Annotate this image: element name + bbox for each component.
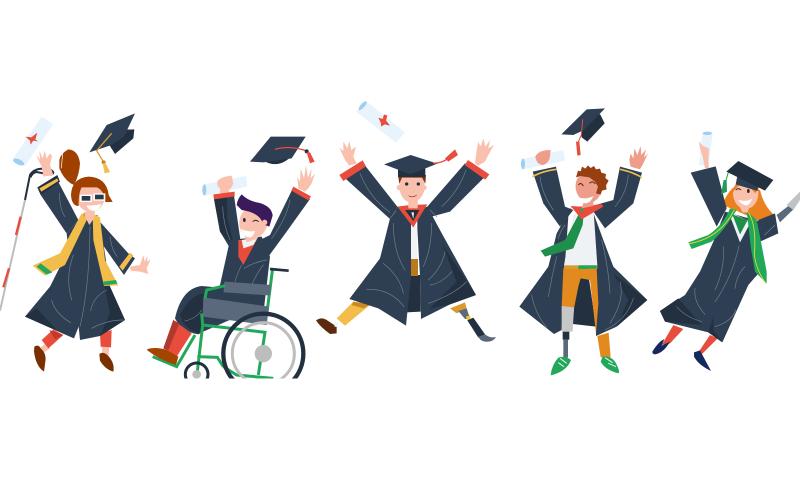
hands [36,151,151,274]
gold sleeve band [37,175,60,195]
red sleeve cuffs [213,192,235,199]
icon: thrown cap [89,113,135,173]
shirt, belt and tie [541,204,603,269]
graduate 3: man with prosthetic leg [316,100,496,342]
graduate 5: woman with prosthetic arm [652,132,800,371]
hands [339,138,494,166]
graduation gown [25,175,135,340]
gown [175,187,311,334]
icon: diploma scroll [12,117,53,167]
leg and shoe [147,320,192,365]
legs and prosthetic [316,302,496,342]
head and hair [237,194,273,265]
wheelchair [153,282,303,394]
icon: thrown diploma [356,100,405,143]
legs and shoes [34,329,114,372]
raised hand [297,166,315,192]
head with sunglasses [59,149,113,225]
white mask cropping the wheelchair bottom [140,378,315,408]
gown [519,167,647,336]
icon: thrown cap [250,137,315,164]
icon: thrown cap [561,108,605,156]
icon: diploma in hand [521,150,565,169]
hair back [722,183,773,222]
head with curly hair [573,165,609,208]
gown [660,166,778,342]
stole [33,212,118,286]
stole [688,208,767,284]
graduate 2: man in wheelchair [147,137,315,394]
gold sleeve bands [532,169,557,177]
hood collar [728,212,751,242]
gown [339,160,489,326]
legs and shoes [652,325,718,371]
icon: prosthetic arm [777,192,800,222]
raised hand [629,146,648,169]
red cuffs [339,160,366,181]
shirt and hood [397,204,427,276]
head and mortarboard [384,149,458,208]
icon: diploma in hand [202,176,247,196]
graduate 4: man with prosthetic leg and green tie [519,108,648,375]
trousers and prosthetic [551,268,619,375]
graduate 1: woman with white cane [0,113,151,372]
icon: white cane [0,169,53,311]
icon: diploma in hand [699,132,713,168]
wheelchair back frame [267,268,289,315]
head and mortarboard [721,161,773,212]
